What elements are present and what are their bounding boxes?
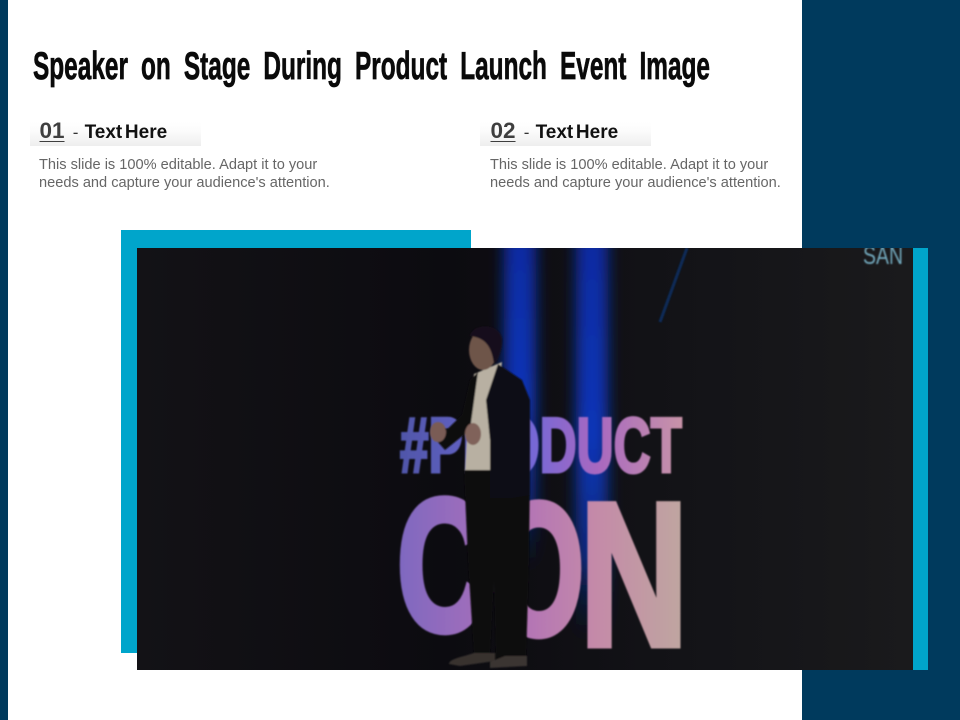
label tag 02 xyxy=(480,122,651,146)
heading 02: 02 - Text Here xyxy=(490,118,618,143)
description 01: This slide is 100% editable. Adapt it to your xyxy=(39,157,317,173)
light streak xyxy=(660,248,687,322)
blue stage light beams xyxy=(504,230,608,640)
speaker figure xyxy=(430,326,530,668)
heading 01: 01 - Text Here xyxy=(40,118,167,143)
large letters CON: C xyxy=(397,460,487,670)
description 02: needs and capture your audience's attention. xyxy=(490,175,781,191)
description 01: needs and capture your audience's attention. xyxy=(39,175,330,191)
large letters CON xyxy=(397,460,688,689)
stage photo xyxy=(137,248,913,670)
text block 02 xyxy=(480,118,781,191)
cyan backing rectangle xyxy=(121,230,471,653)
legs xyxy=(464,470,530,660)
text block 01 xyxy=(30,118,330,191)
description 02: This slide is 100% editable. Adapt it to your xyxy=(490,157,768,173)
right navy panel xyxy=(802,0,960,720)
label tag 01 xyxy=(30,122,201,146)
backdrop xyxy=(137,248,913,670)
hashtag word: #PRODUCT xyxy=(400,401,682,489)
cyan right strip xyxy=(913,248,928,670)
left navy edge band xyxy=(0,0,8,720)
head and hair xyxy=(469,330,497,370)
large letters CON: O xyxy=(494,464,584,670)
hands xyxy=(430,422,446,442)
shirt xyxy=(465,362,502,470)
description 01 xyxy=(39,157,330,191)
shoes xyxy=(449,653,495,666)
description 02 xyxy=(490,157,781,191)
jacket xyxy=(486,364,530,498)
